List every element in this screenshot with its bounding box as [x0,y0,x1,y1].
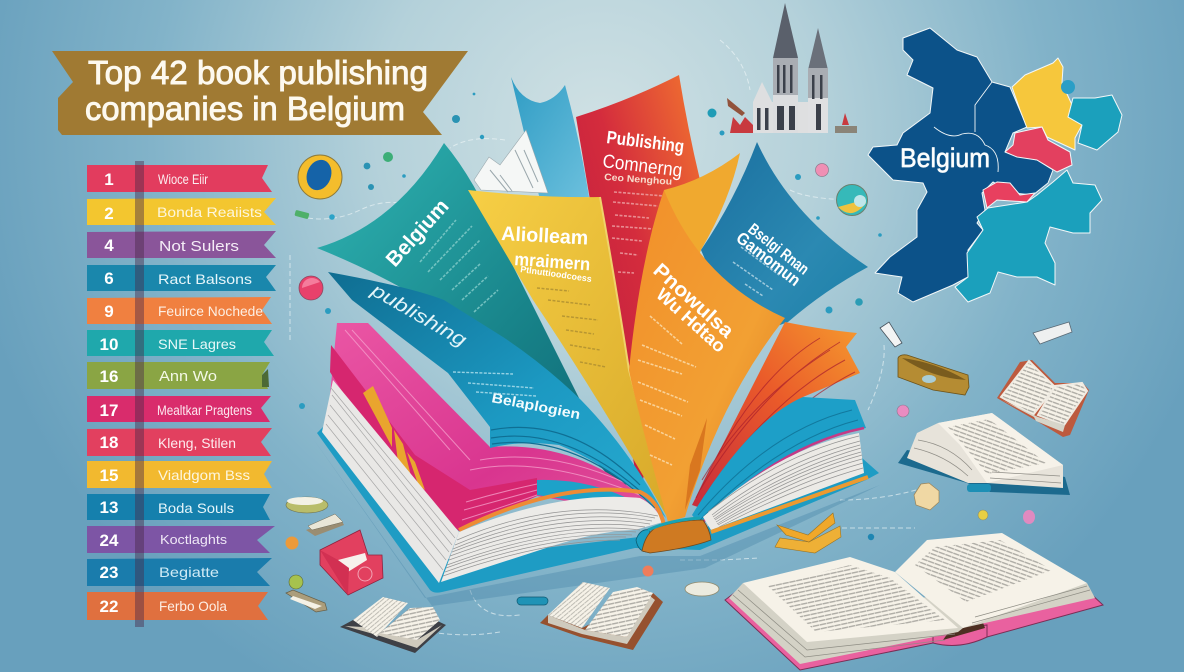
list row 1: Wioce Eiir [158,172,208,187]
list row 11: Boda Souls [158,500,234,516]
red sheet: Ceo Nenghou [604,172,673,188]
gold ring [898,355,969,395]
list row 10 [87,461,272,488]
list row 6: 10 [100,335,118,354]
ranked list of publishers [87,161,276,627]
large open book bottom right [725,533,1103,670]
map: red region north [1005,127,1072,172]
list row 13: Begiatte [159,564,219,580]
map: north-east teal region [1068,95,1122,150]
list row 2: Bonda Reaiists [157,205,262,220]
title text: Top 42 book publishing [88,54,428,91]
yellow sheet [468,190,670,522]
list row 3: Not Sulers [159,239,239,255]
right blue sheet: Gamomun [733,228,804,290]
list row 11: 13 [100,498,118,517]
list row 7: Ann Wo [159,369,217,385]
dashed flight paths [290,40,916,635]
open book middle right [898,413,1070,495]
small open book bottom centre-left [340,597,446,653]
list row 12: Koctlaghts [160,532,228,547]
right white page block [703,433,868,532]
list row 9: Kleng, Stilen [158,435,236,451]
list row 2: 2 [104,204,114,223]
list row 10: Vialdgom Bss [158,467,250,483]
list row 8: 17 [100,401,118,420]
left white page block [322,380,459,583]
red sheet heading: Publishing [606,127,685,156]
list row 10: 15 [100,466,118,485]
list row 4: Ract Balsons [158,271,252,287]
ribbon tag [1033,322,1072,344]
map label: Belgium [900,143,990,173]
list row 1: 1 [104,170,114,189]
list row 11 [87,494,270,520]
map: south teal region [955,170,1102,302]
list row 4: 6 [104,269,114,288]
blue sheet lower heading: Belaplogien [490,389,582,422]
list row 8 [87,396,271,422]
cream blob [914,483,939,510]
list row 9: 18 [100,433,118,452]
pebble 2 highlight [308,514,343,530]
teal sheet heading: Belgium [382,195,454,271]
list row 13 [87,558,272,586]
list row 6: SNE Lagres [158,336,236,352]
red sheet: Comnerng [601,151,683,182]
gold chevrons [775,513,841,553]
list row 12 [87,526,275,553]
yellow sheet heading: Aliolleam [501,223,589,250]
list row 13: 23 [100,563,118,582]
list row 3: 4 [104,236,114,255]
right red and orange page stack [692,322,860,510]
right blue sheet [701,142,868,340]
list row 4 [87,265,276,291]
scattered small objects right [775,322,1072,553]
book spine [636,518,711,553]
map: red region south [983,182,1035,208]
right blue page stack [692,397,866,525]
red open box [320,530,383,595]
list row 12: 24 [100,531,119,550]
tin case [286,575,327,612]
small open book top right [997,360,1089,437]
left blue lower sheet [328,272,666,518]
map: dark blue regions [868,28,1053,302]
mid blue tab over pink [537,480,652,512]
large open book [317,75,879,593]
spine label band [363,386,425,490]
list row 9 [87,428,272,456]
blue pill [517,597,548,605]
teal sheet [317,143,640,510]
list row 5 [87,297,272,324]
blue sheet script heading: publishing [366,280,470,352]
white tag [880,322,902,347]
book cover [317,420,879,593]
list row 8: Mealtkar Pragtens [157,403,252,418]
book ground shadow [314,440,880,606]
map: internal borders [934,82,998,172]
red sheet [576,75,700,500]
title ribbon [52,51,468,135]
small stationery items [286,497,719,612]
yellow sheet: mraimern [514,249,591,274]
list row 14: 22 [100,597,118,616]
cathedral [727,3,857,133]
list row 1 [87,165,272,192]
right blue sheet heading: Bselgi Rnan [745,221,812,278]
orange sheet [629,190,785,522]
orange sheet heading: Pnowulsa [649,259,738,343]
list row 7: 16 [100,367,118,386]
map of Belgium [868,28,1122,302]
left pink page stack [330,323,664,531]
list row 2 [87,198,276,225]
pebble 2 [306,518,344,536]
list row 5: 9 [104,302,114,321]
pebble 1 [286,497,328,513]
list spine [135,161,144,627]
pebble 3 [685,582,719,596]
title text: companies in Belgium [85,90,405,127]
white loose page [474,130,548,193]
list row 14: Ferbo Oola [159,598,227,614]
list row 6 [87,330,274,356]
list row 5: Feuirce Nochede [158,304,263,319]
small open book bottom centre [540,582,663,650]
orange sheet: Wu Hdtao [652,284,730,357]
map: yellow region [1012,58,1082,150]
back orange sheet [664,153,740,300]
map: lake [1061,80,1075,94]
pebble 1 highlight [287,497,323,505]
list row 14 [87,592,268,620]
bottom white page block [441,490,664,582]
list row 7 [87,362,270,389]
top fan blue sheet [511,77,589,200]
teal sheet heading [382,195,498,312]
floating dots [286,93,1035,576]
list row 3 [87,231,276,258]
yellow sheet: Ptlnuttioodcoess [520,264,592,284]
